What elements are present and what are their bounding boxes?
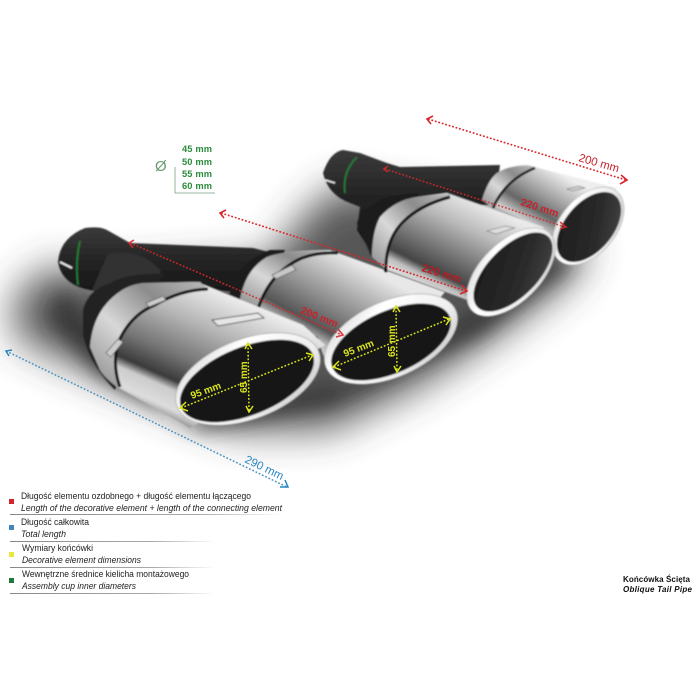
rear inner tube <box>357 193 555 303</box>
diameter values: 50 mm <box>182 157 212 167</box>
legend row: green: Assembly cup inner diameters <box>21 581 136 591</box>
back tube front pair <box>228 250 445 380</box>
legend row: red <box>9 491 282 515</box>
legend row: yellow: Decorative element dimensions <box>22 555 141 565</box>
label 290 mm: 290 mm <box>243 454 285 483</box>
drop shadow under tail pipes <box>10 185 590 430</box>
diameter values <box>182 144 212 191</box>
arrow 200 mm rear top <box>427 116 627 184</box>
legend row: green <box>9 569 215 594</box>
rear outer tip opening <box>538 174 638 278</box>
rear connecting pipe <box>323 150 500 250</box>
left tip arrows: 65 mm <box>239 361 250 393</box>
product title: Oblique Tail Pipe <box>623 585 693 594</box>
label 220 mm front: 220 mm <box>420 262 463 286</box>
tube left front pair <box>83 274 325 428</box>
right tip arrows <box>333 306 450 372</box>
dimensions: red length arrows <box>129 116 627 337</box>
diameter values: 45 mm <box>182 144 212 154</box>
legend row: blue: Total length <box>21 529 66 539</box>
product title: Końcówka Ścięta <box>623 575 691 584</box>
diameter values: 60 mm <box>182 181 212 191</box>
diameter values: 55 mm <box>182 169 212 179</box>
legend row: yellow <box>9 543 215 568</box>
rear tail pipe pair <box>323 150 638 332</box>
legend row: blue: Długość całkowita <box>21 517 89 527</box>
legend <box>9 491 282 594</box>
legend row: red: Length of the decorative element + length of the connecting element <box>21 503 282 513</box>
assembly cup diameters block <box>155 144 215 193</box>
right tip arrows: 65 mm <box>387 325 398 357</box>
front tail pipe pair <box>58 227 471 444</box>
front connecting pipe <box>58 227 273 300</box>
left tip arrows <box>180 343 313 412</box>
arrow 220 mm front <box>220 210 467 294</box>
label 220 mm rear: 220 mm <box>519 196 560 220</box>
legend row: green: Wewnętrzne średnice kielicha montażowego <box>22 569 189 579</box>
legend row: yellow: Wymiary końcówki <box>22 543 93 553</box>
red length labels <box>299 152 620 330</box>
arrow 200 mm front <box>129 240 343 337</box>
legend row: red: Długość elementu ozdobnego + długość elementu łączącego <box>21 491 251 501</box>
diameter symbol: Ø <box>155 158 167 175</box>
tip opening left <box>163 314 333 444</box>
label 200 mm rear: 200 mm <box>577 152 620 175</box>
dimensions: blue total length arrow <box>6 350 288 487</box>
arrow 220 mm rear <box>384 166 566 229</box>
label 200 mm front: 200 mm <box>299 305 340 330</box>
rear inner tip opening <box>451 212 571 332</box>
rear outer tube <box>482 165 617 255</box>
product title <box>623 575 693 594</box>
tip opening right <box>311 275 471 403</box>
dimensions: yellow tip dimensions <box>180 306 450 412</box>
right tip arrows: 95 mm <box>342 338 376 360</box>
legend row: blue <box>9 517 215 542</box>
left tip arrows: 95 mm <box>189 381 223 402</box>
